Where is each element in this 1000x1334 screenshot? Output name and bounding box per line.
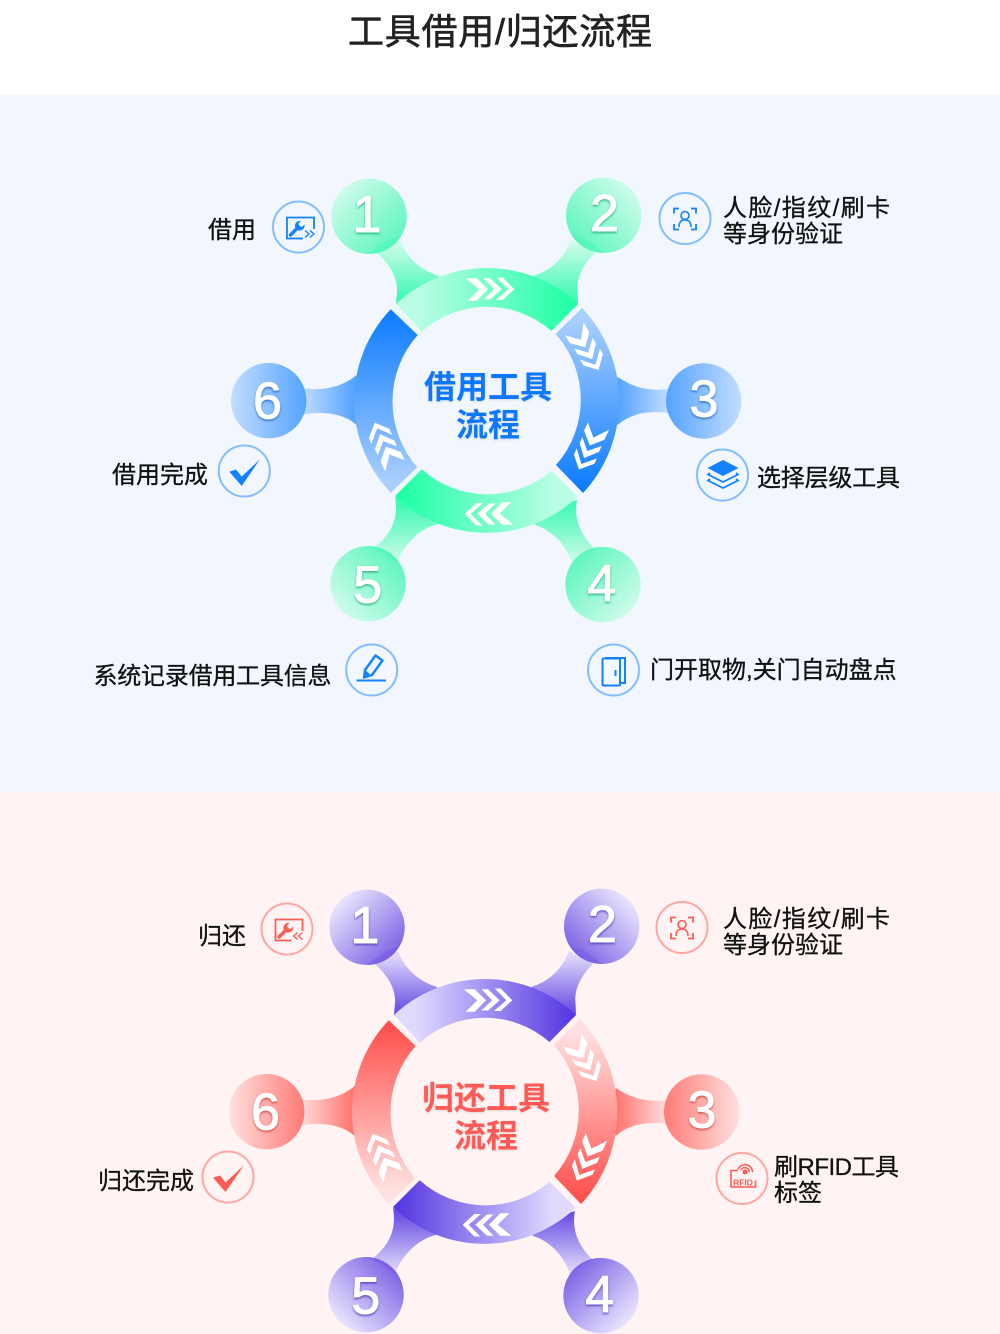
arrow: right lower chevrons	[566, 1132, 608, 1185]
step 4 node: 4	[587, 555, 616, 613]
arrow: top chevrons	[466, 278, 514, 301]
step 6 label: 借用完成	[112, 462, 208, 489]
connector 2	[531, 951, 593, 1015]
icon: face scan	[656, 902, 708, 953]
arrow: right upper chevrons	[562, 1033, 607, 1087]
connector 1	[377, 240, 440, 304]
icon: wrench screen	[262, 904, 312, 954]
icon: wrench screen	[273, 202, 324, 252]
panel: borrowing flow	[0, 95, 1000, 792]
connector 5	[373, 1208, 440, 1273]
step 2 node: 2	[590, 185, 619, 243]
connector 4	[528, 1211, 593, 1274]
step 2 node	[564, 889, 639, 964]
arrow: bottom chevrons	[463, 1213, 511, 1236]
hub diagram: borrowing	[231, 178, 741, 622]
arrow: bottom chevrons	[465, 502, 513, 526]
step 2 label: 人脸/指纹/刷卡	[723, 906, 890, 933]
connector 3	[610, 377, 668, 425]
step 3 node: 3	[690, 370, 718, 428]
step 5 node: 5	[353, 556, 382, 614]
icon: face scan	[660, 193, 710, 244]
ring segment: right	[556, 308, 619, 493]
hub title: 流程	[456, 407, 520, 443]
step 6 node	[231, 363, 306, 438]
step 2 node	[566, 178, 641, 253]
step 5 label: 系统记录借用工具信息	[94, 663, 332, 690]
step 4 node	[563, 1258, 639, 1333]
arrow: left chevrons	[364, 418, 406, 472]
step 6 node	[229, 1074, 304, 1149]
step 4 node	[565, 547, 641, 622]
icon: check	[202, 1152, 254, 1202]
step 5 node	[330, 546, 406, 621]
step 1 label: 借用	[208, 217, 256, 244]
arrow: right lower chevrons	[568, 421, 610, 474]
ring segment: bottom	[393, 1180, 576, 1244]
arrow: right upper chevrons	[564, 322, 609, 376]
ring segment: bottom	[395, 469, 578, 533]
step 5 node: 5	[351, 1268, 380, 1326]
step 3 node	[664, 1074, 739, 1150]
connector 6	[300, 1086, 363, 1136]
hub title	[424, 369, 552, 443]
step 3 label: 标签	[774, 1180, 822, 1207]
ring segment: left	[354, 309, 418, 493]
connector 4	[530, 500, 595, 563]
step 1 node	[329, 890, 405, 965]
step 3 node: 3	[688, 1082, 716, 1140]
icon: pencil	[346, 644, 397, 696]
step 2 node: 2	[588, 896, 617, 954]
step 6 node: 6	[251, 1084, 280, 1142]
ring segment: top	[394, 979, 576, 1043]
hub title: 借用工具	[424, 369, 552, 405]
connector 6	[302, 375, 365, 425]
icon: check	[219, 446, 270, 496]
step 5 node	[328, 1257, 404, 1332]
hub title: 流程	[454, 1118, 518, 1154]
connector 1	[375, 951, 438, 1015]
step 1 label: 归还	[198, 923, 246, 950]
step 2 label: 等身份验证	[723, 932, 843, 959]
step 1 node: 1	[353, 186, 381, 244]
step 4 node: 4	[585, 1266, 614, 1324]
connector 2	[533, 240, 595, 304]
connector 5	[375, 497, 442, 562]
step 2 label	[723, 195, 890, 248]
step 2 label: 等身份验证	[723, 221, 843, 248]
icon: RFID: RFID	[733, 1178, 753, 1188]
title: 工具借用/归还流程	[348, 11, 652, 52]
ring segment: left	[352, 1020, 416, 1204]
hub diagram: return	[229, 889, 739, 1333]
step 1 node	[331, 179, 407, 254]
step 2 label	[723, 906, 890, 959]
step 3 node	[666, 363, 741, 439]
step 6 label: 归还完成	[98, 1168, 194, 1195]
icon: layers	[697, 450, 748, 500]
arrow: left chevrons	[362, 1129, 404, 1183]
step 3 label: 刷RFID工具	[774, 1154, 899, 1181]
panel: return flow	[0, 792, 1000, 1334]
step 1 node: 1	[351, 897, 379, 955]
step 2 label: 人脸/指纹/刷卡	[723, 195, 890, 222]
arrow: top chevrons	[464, 988, 512, 1012]
step 3 label: 选择层级工具	[757, 465, 900, 492]
icon: door	[588, 644, 639, 696]
hub title: 归还工具	[422, 1080, 550, 1116]
ring segment: top	[396, 268, 578, 332]
connector 3	[608, 1088, 666, 1136]
step 4 label: 门开取物,关门自动盘点	[650, 657, 897, 684]
hub title	[422, 1080, 550, 1154]
icon: RFID	[716, 1153, 768, 1204]
ring segment: right	[554, 1019, 617, 1204]
step 6 node: 6	[253, 372, 282, 430]
step 3 label	[774, 1154, 899, 1207]
